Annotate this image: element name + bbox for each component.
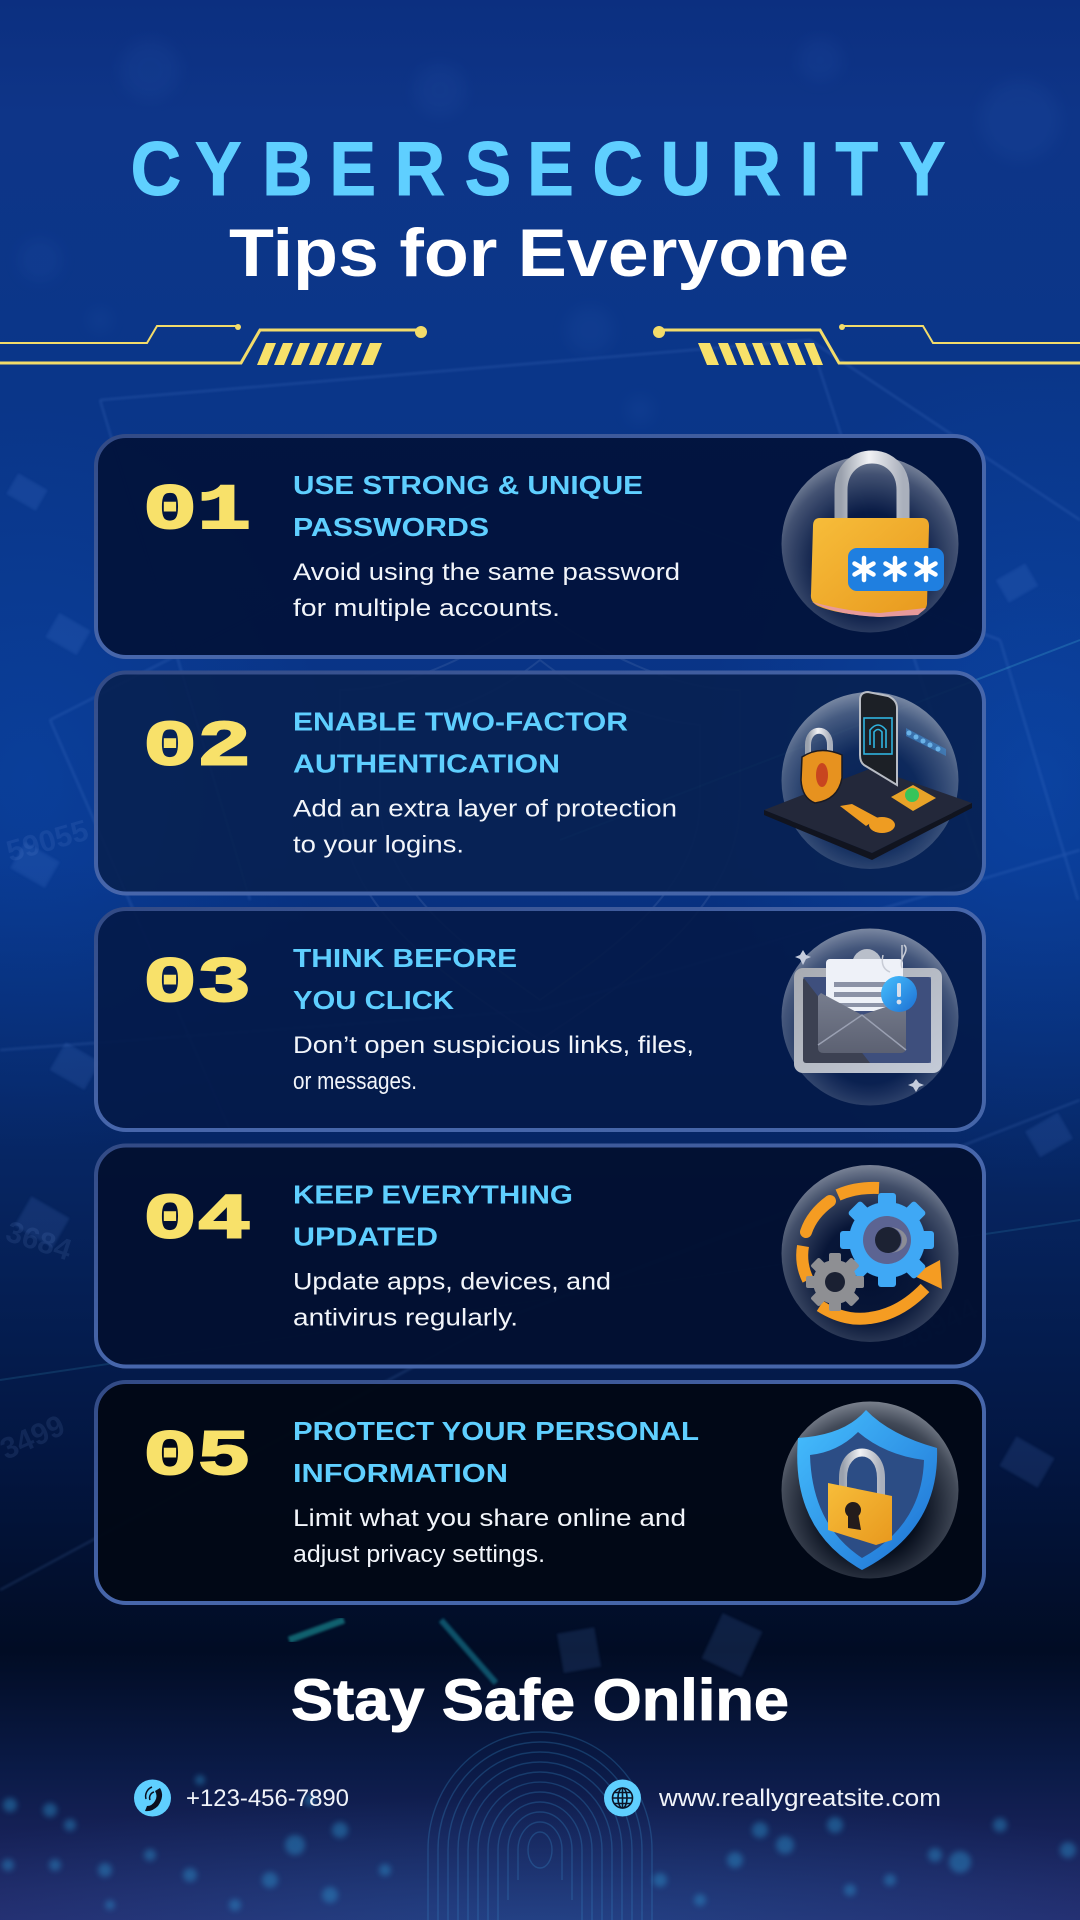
heading: protect personal information bbox=[293, 1416, 699, 1488]
background: 59055 bbox=[3, 814, 92, 869]
panel: tip 5 bbox=[96, 1382, 984, 1603]
icon: padlock with password bbox=[782, 456, 958, 632]
icon: phishing email bbox=[782, 928, 958, 1106]
heading: think before you click: YOU CLICK bbox=[293, 985, 454, 1015]
description: Don’t open suspicious links, files, bbox=[293, 1032, 694, 1059]
card background 3 bbox=[96, 909, 984, 1130]
heading: think before you click bbox=[293, 943, 517, 1015]
number 03: 03 bbox=[143, 949, 251, 1021]
background: fingerprint bbox=[428, 1732, 652, 1920]
card background 2 bbox=[96, 672, 984, 894]
description: or messages. bbox=[293, 1068, 417, 1095]
heading: two-factor: AUTHENTICATION bbox=[293, 748, 560, 778]
description bbox=[293, 796, 677, 858]
icon: phone, lock and key on platform bbox=[764, 692, 972, 869]
subtitle: Tips for Everyone: Tips for Everyone bbox=[229, 215, 849, 291]
description bbox=[293, 1032, 694, 1095]
description: Limit what you share online and bbox=[293, 1505, 686, 1532]
background: 3684 bbox=[2, 1215, 76, 1267]
icon: phone bbox=[134, 1780, 171, 1816]
background: glowing data particles bbox=[2, 1775, 1076, 1911]
panel: tip 2 bbox=[96, 672, 984, 894]
description: Avoid using the same password bbox=[293, 559, 680, 586]
heading: strong passwords: USE STRONG & UNIQUE bbox=[293, 470, 643, 500]
heading: keep everything updated bbox=[293, 1180, 573, 1252]
contact: website bbox=[604, 1780, 941, 1816]
circuit decoration right bbox=[653, 324, 1080, 365]
card background 1 bbox=[96, 436, 984, 657]
heading: two-factor bbox=[293, 706, 628, 778]
card background 5 bbox=[96, 1382, 984, 1603]
background: 48944 bbox=[894, 1292, 983, 1358]
description: Update apps, devices, and bbox=[293, 1268, 611, 1296]
heading: strong passwords bbox=[293, 470, 643, 542]
title: CYBERSECURITY: CYBERSECURITY bbox=[131, 127, 945, 212]
heading: protect personal information: PROTECT YOUR PERSONAL bbox=[293, 1416, 699, 1446]
icon: shield with lock bbox=[782, 1402, 958, 1578]
phone number: +123-456-7890 bbox=[186, 1785, 349, 1812]
website address: www.reallygreatsite.com bbox=[658, 1785, 941, 1812]
description: for multiple accounts. bbox=[293, 595, 560, 622]
description: antivirus regularly. bbox=[293, 1304, 518, 1332]
icon: gears and update arrow bbox=[782, 1165, 958, 1342]
panel: tip 4 bbox=[96, 1146, 984, 1366]
description bbox=[293, 1268, 611, 1332]
description: Add an extra layer of protection bbox=[293, 796, 677, 822]
description bbox=[293, 1505, 686, 1568]
contact: phone bbox=[134, 1780, 349, 1816]
heading: keep everything updated: KEEP EVERYTHING bbox=[293, 1180, 573, 1210]
panel: tip 1 bbox=[96, 436, 984, 657]
description bbox=[293, 559, 680, 622]
number 05: 05 bbox=[143, 1422, 251, 1494]
description: to your logins. bbox=[293, 832, 464, 858]
card background 4 bbox=[96, 1146, 984, 1366]
heading: two-factor: ENABLE TWO-FACTOR bbox=[293, 706, 628, 736]
number 01: 01 bbox=[143, 476, 251, 548]
heading: strong passwords: PASSWORDS bbox=[293, 512, 489, 542]
panel: tip 3 bbox=[96, 909, 984, 1130]
circuit decoration left bbox=[0, 324, 427, 365]
number 02: 02 bbox=[143, 712, 251, 784]
number 04: 04 bbox=[143, 1186, 251, 1258]
heading: keep everything updated: UPDATED bbox=[293, 1222, 438, 1252]
description: adjust privacy settings. bbox=[293, 1541, 545, 1568]
heading: protect personal information: INFORMATION bbox=[293, 1458, 508, 1488]
icon: globe bbox=[604, 1780, 641, 1816]
heading: think before you click: THINK BEFORE bbox=[293, 943, 517, 973]
closing headline: Stay Safe Online: Stay Safe Online bbox=[291, 1668, 789, 1733]
